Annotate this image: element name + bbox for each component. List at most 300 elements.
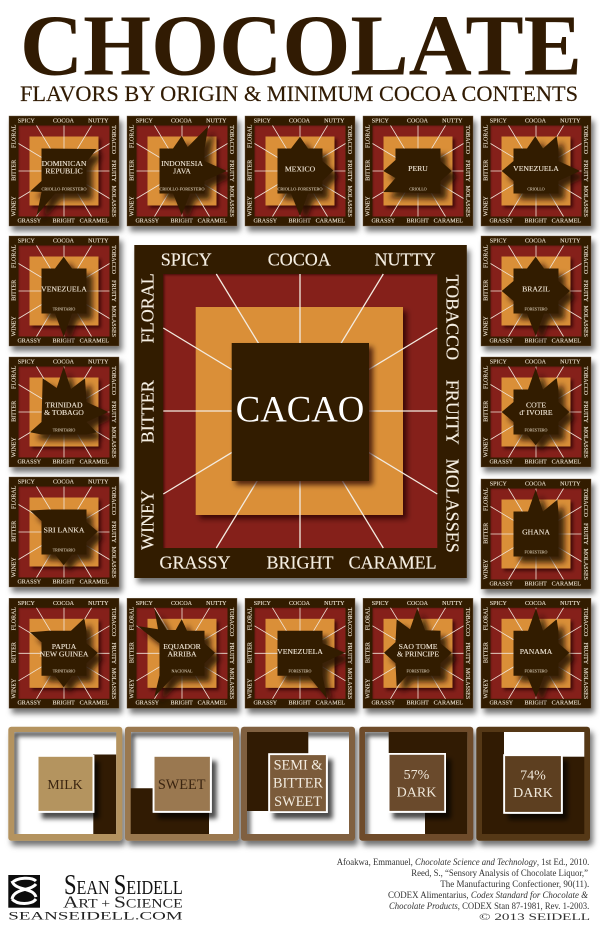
flavor labels: FRUITY [110,401,116,423]
flavor labels: CARAMEL [80,218,109,224]
flavor labels: TOBACCO [110,245,116,275]
flavor labels: CARAMEL [552,218,581,224]
flavor star [514,490,558,556]
references: © 2013 SEIDELL [479,912,590,922]
flavor labels: GRASSY [489,338,514,344]
flavor labels: NUTTY [324,601,345,607]
flavor labels: SPICY [18,239,35,245]
brand tagline: A RT + SCIENCE [63,893,183,912]
flavor labels: BRIGHT [289,218,311,224]
origin name: PERU [408,164,428,173]
flavor labels: WINEY [11,437,17,457]
flavor labels: FLORAL [247,607,253,630]
flavor labels: WINEY [129,196,135,216]
bean type: FORESTERO [525,427,548,432]
flavor labels: MOLASSES [582,186,588,217]
flavor labels: FRUITY [582,160,588,182]
legend: milk [8,727,125,844]
origin name: EQUADOR [163,642,202,651]
origin name: REPUBLIC [45,167,83,176]
flavor star [30,618,98,687]
flavor labels: WINEY [11,557,17,577]
flavor labels: MOLASSES [110,186,116,217]
flavor labels: BITTER [11,160,17,181]
bean type: TRINITARIO [53,547,75,552]
flavor labels: BITTER [137,380,157,443]
flavor labels: BITTER [365,160,371,181]
panel: Peru [363,116,473,226]
flavor labels: WINEY [11,678,17,699]
panel: Venezuela Forestero [245,598,355,708]
flavor labels: MOLASSES [110,306,116,337]
flavor labels: NUTTY [560,482,581,488]
flavor labels: FRUITY [582,401,588,423]
flavor labels [483,601,588,707]
flavor labels: TOBACCO [464,125,470,155]
flavor labels: TOBACCO [228,125,234,155]
legend: semi and bitter sweet [241,727,358,844]
panel: Sri Lanka [9,477,119,587]
flavor labels: BRIGHT [407,701,429,707]
flavor labels: GRASSY [371,218,396,224]
flavor labels: TOBACCO [110,608,116,637]
flavor labels: TOBACCO [346,125,352,155]
bean type: CRIOLLO·FORESTERO [278,186,323,191]
flavor labels: SPICY [254,119,271,125]
flavor labels [11,601,116,707]
panel: Trinidad & Tobago [9,357,119,467]
flavor labels: CARAMEL [349,552,437,572]
flavor labels: SPICY [136,601,153,607]
flavor labels: MOLASSES [464,668,470,699]
flavor labels: NUTTY [88,601,109,607]
flavor labels: GRASSY [17,338,42,344]
flavor labels: FRUITY [228,642,234,665]
label: 57% [404,768,430,783]
flavor labels: CARAMEL [552,581,581,587]
origin name: & TOBAGO [44,408,84,417]
flavor labels: COCOA [525,119,547,125]
flavor labels: FLORAL [11,124,17,148]
flavor labels: TOBACCO [110,486,116,516]
flavor labels: FRUITY [443,380,463,445]
flavor labels: FRUITY [346,160,352,182]
flavor labels: WINEY [483,559,489,579]
flavor labels: CARAMEL [80,701,109,707]
flavor labels: FRUITY [110,642,116,665]
flavor labels: FRUITY [110,521,116,543]
flavor labels: BITTER [365,642,371,663]
flavor labels: WINEY [247,196,253,216]
flavor labels [365,119,470,224]
flavor labels: BRIGHT [266,552,334,572]
legend: sweet [125,727,242,844]
subtitle: FLAVORS BY ORIGIN & MINIMUM COCOA CONTENTS [20,81,578,106]
origin name: d' IVOIRE [519,408,553,417]
flavor labels: FRUITY [228,160,234,182]
flavor labels: MOLASSES [110,668,116,699]
flavor labels: SPICY [372,601,389,607]
references: Afoakwa, Emmanuel, Chocolate Science and Technology, 1st Ed., 2010. [337,857,589,867]
flavor star [278,137,333,216]
flavor star [30,148,97,216]
flavor labels: FLORAL [129,124,135,148]
flavor labels: CARAMEL [198,218,227,224]
flavor labels: COCOA [525,360,547,366]
flavor labels: TOBACCO [582,245,588,275]
flavor labels: BITTER [11,401,17,422]
flavor labels: GRASSY [135,218,160,224]
panel: Equador Arriba [127,598,237,708]
origin name: JAVA [173,167,191,176]
origin name: VENEZUELA [277,647,323,656]
flavor labels: WINEY [129,678,135,699]
flavor labels: MOLASSES [228,668,234,699]
flavor labels [483,482,588,587]
flavor labels: NUTTY [560,119,581,125]
flavor labels: CARAMEL [80,579,109,585]
flavor labels: SPICY [490,119,507,125]
flavor labels: BITTER [11,280,17,301]
icon: Sean Seidell logo mark [8,875,40,908]
flavor labels: CARAMEL [198,701,227,707]
flavor labels: COCOA [407,601,429,607]
flavor labels: SPICY [490,239,507,245]
flavor labels: NUTTY [88,239,109,245]
flavor labels: FLORAL [365,607,371,630]
origin name: TRINIDAD [45,400,83,410]
flavor labels: BITTER [129,160,135,181]
flavor labels: GRASSY [17,701,42,707]
panel: Mexico [245,116,355,226]
flavor labels: MOLASSES [582,549,588,580]
flavor labels: TOBACCO [110,125,116,155]
center label: CACAO [236,389,364,430]
flavor labels: SPICY [490,482,507,488]
flavor labels: TOBACCO [464,608,470,637]
flavor labels: MOLASSES [582,427,588,458]
flavor labels: MOLASSES [443,459,463,553]
flavor labels: GRASSY [159,552,231,572]
flavor labels: SPICY [372,119,389,125]
bean type: CRIOLLO [409,186,427,191]
origin name: SRI LANKA [44,526,85,534]
flavor labels: GRASSY [489,218,514,224]
origin name: ARRIBA [167,649,197,658]
flavor star [383,148,452,194]
references: Reed, S., “Sensory Analysis of Chocolate Liquor,” [411,868,588,878]
flavor labels: COCOA [289,119,311,125]
flavor labels: BRIGHT [171,218,193,224]
label: DARK [397,786,436,801]
flavor labels: TOBACCO [582,608,588,637]
flavor labels: GRASSY [253,701,278,707]
flavor labels: WINEY [137,490,157,550]
bean type: TRINITARIO [53,306,75,311]
bean type: CRIOLLO·FORESTERO [160,186,205,191]
label: MILK [47,777,83,792]
panel: Cote d'Ivoire [481,357,591,467]
flavor labels: WINEY [483,678,489,699]
flavor labels: NUTTY [442,119,463,125]
flavor labels: SPICY [18,360,35,366]
flavor labels: WINEY [365,196,371,216]
flavor labels: MOLASSES [582,668,588,699]
flavor labels: BRIGHT [525,338,547,344]
flavor labels: NUTTY [560,601,581,607]
origin name: PANAMA [520,647,553,656]
origin name: & PRINCIPE [397,649,439,658]
bean type: FORESTERO [525,549,548,554]
flavor labels: WINEY [483,196,489,216]
flavor labels: WINEY [247,678,253,699]
flavor labels: WINEY [11,316,17,336]
brand name: SEAN SEIDELL [64,870,183,901]
flavor labels: BRIGHT [525,218,547,224]
flavor labels: FLORAL [483,244,489,268]
flavor labels: CARAMEL [316,218,345,224]
flavor labels: BRIGHT [525,581,547,587]
flavor labels: NUTTY [206,601,227,607]
flavor labels: FRUITY [464,642,470,665]
panel: Venezuela Criollo [481,116,591,226]
origin name: INDONESIA [161,159,203,168]
flavor labels: MOLASSES [346,186,352,217]
flavor labels: NUTTY [560,360,581,366]
panel: Venezuela Trinitario [9,236,119,346]
bean type: TRINITARIO [53,669,75,674]
flavor labels: FLORAL [483,365,489,389]
flavor labels: NUTTY [206,119,227,125]
flavor labels: BRIGHT [407,218,429,224]
flavor labels: FLORAL [11,485,17,509]
flavor labels: BRIGHT [171,701,193,707]
origin name: DOMINICAN [42,159,87,168]
flavor labels: NUTTY [442,601,463,607]
flavor labels: MOLASSES [464,186,470,217]
panel: Papua New Guinea [9,598,119,708]
flavor labels: MOLASSES [582,306,588,337]
flavor labels: GRASSY [489,581,514,587]
flavor labels: COCOA [268,250,331,270]
flavor labels: GRASSY [135,701,160,707]
flavor labels: SPICY [490,601,507,607]
flavor labels [247,119,352,224]
flavor labels: SPICY [18,119,35,125]
label: SWEET [274,794,322,810]
flavor labels: COCOA [525,601,547,607]
flavor labels: COCOA [289,601,311,607]
flavor star [137,608,215,697]
flavor labels: COCOA [53,480,75,486]
label: SWEET [158,777,206,793]
flavor labels: SPICY [490,360,507,366]
flavor labels: BRIGHT [53,579,75,585]
flavor labels: FLORAL [247,124,253,148]
flavor labels: COCOA [171,601,193,607]
flavor labels: TOBACCO [346,608,352,637]
flavor labels: BRIGHT [53,701,75,707]
flavor labels: TOBACCO [582,366,588,396]
flavor labels: BRIGHT [525,459,547,465]
flavor labels [11,360,116,465]
flavor star [278,631,345,699]
flavor labels: FLORAL [137,273,157,343]
flavor labels: BITTER [247,642,253,663]
origin name: SAO TOME [399,642,438,651]
flavor labels: BRIGHT [525,701,547,707]
flavor labels: CARAMEL [316,701,345,707]
flavor labels: BITTER [247,160,253,181]
panel: Brazil [481,236,591,346]
flavor labels: CARAMEL [552,338,581,344]
flavor star [384,608,452,687]
origin name: NEW GUINEA [40,649,89,658]
flavor labels: NUTTY [88,119,109,125]
flavor labels: BITTER [483,642,489,663]
flavor labels: FLORAL [11,244,17,268]
flavor labels: WINEY [11,196,17,216]
flavor labels: BRIGHT [53,218,75,224]
flavor labels: BITTER [483,280,489,301]
flavor labels: COCOA [53,119,75,125]
flavor labels: FRUITY [582,280,588,302]
flavor labels: CARAMEL [80,338,109,344]
flavor labels: MOLASSES [346,668,352,699]
flavor labels [129,119,234,224]
flavor labels [11,480,116,585]
flavor labels: MOLASSES [228,186,234,217]
flavor labels: MOLASSES [110,547,116,578]
flavor labels [365,601,470,707]
bean type: FORESTERO [525,669,548,674]
flavor labels [129,601,234,707]
flavor labels: FRUITY [464,160,470,182]
panel: Sao Tome & Principe [363,598,473,708]
flavor star [30,367,108,434]
flavor labels: WINEY [483,316,489,336]
flavor labels: NUTTY [88,480,109,486]
flavor labels: NUTTY [324,119,345,125]
flavor labels: CARAMEL [80,459,109,465]
flavor labels: FLORAL [11,607,17,630]
flavor labels: SPICY [18,601,35,607]
flavor labels: CARAMEL [434,218,463,224]
flavor labels: SPICY [136,119,153,125]
references: Chocolate Products, CODEX Stan 87-1981, Rev. 1-2003. [389,901,589,911]
flavor star [30,510,98,565]
flavor labels: BITTER [11,521,17,542]
references: The Manufacturing Confectioner, 90(11). [440,879,589,889]
flavor star [160,126,227,215]
label: 74% [520,768,546,784]
flavor star [42,257,86,337]
bean type: NACIONAL [172,669,193,674]
flavor labels: FRUITY [346,642,352,665]
legend: 57% dark [359,727,476,844]
flavor labels: NUTTY [88,360,109,366]
references: CODEX Alimentarius, Codex Standard for Chocolate & [388,890,589,900]
legend: 74% dark [476,727,590,841]
flavor labels: GRASSY [489,459,514,465]
flavor labels: FLORAL [483,487,489,511]
flavor labels: WINEY [365,678,371,699]
flavor labels: BITTER [483,160,489,181]
flavor labels: FLORAL [129,607,135,630]
references [337,857,590,922]
bean type: TRINITARIO [53,427,75,432]
flavor labels [483,360,588,465]
flavor labels: FLORAL [365,124,371,148]
origin name: COTE [526,400,546,410]
flavor labels: BRIGHT [53,459,75,465]
flavor star [502,368,569,445]
origin name: GHANA [522,528,550,536]
flavor labels: TOBACCO [582,488,588,518]
flavor labels: COCOA [53,239,75,245]
flavor labels [137,250,463,572]
flavor labels: BITTER [11,642,17,663]
origin name: MEXICO [285,164,316,174]
flavor star [502,136,580,194]
flavor labels [11,119,116,224]
flavor labels: TOBACCO [228,608,234,637]
flavor labels: FRUITY [582,523,588,545]
origin name: BRAZIL [522,284,550,294]
flavor labels [247,601,352,707]
website: SEANSEIDELL.COM [8,909,183,922]
flavor labels: GRASSY [253,218,278,224]
flavor labels: COCOA [525,239,547,245]
flavor labels: GRASSY [17,579,42,585]
flavor labels: TOBACCO [582,125,588,155]
flavor labels: COCOA [53,360,75,366]
flavor labels: FRUITY [110,160,116,182]
bean type: FORESTERO [407,669,430,674]
flavor labels: GRASSY [17,218,42,224]
flavor labels: BRIGHT [289,701,311,707]
flavor labels [483,239,588,344]
flavor labels: FRUITY [582,642,588,665]
bean type: FORESTERO [525,306,548,311]
flavor labels: COCOA [171,119,193,125]
flavor labels [11,239,116,344]
flavor labels: SPICY [18,480,35,486]
flavor labels: GRASSY [489,701,514,707]
bean type: CRIOLLO·FORESTERO [42,186,87,191]
flavor labels: FLORAL [483,124,489,148]
flavor labels: NUTTY [560,239,581,245]
flavor labels: GRASSY [371,701,396,707]
flavor labels: COCOA [525,482,547,488]
flavor labels [483,119,588,224]
flavor labels: BITTER [483,523,489,544]
origin name: VENEZUELA [513,164,559,173]
flavor labels: CARAMEL [552,701,581,707]
flavor labels: TOBACCO [443,274,463,360]
flavor labels: SPICY [161,250,212,270]
flavor labels: TOBACCO [110,366,116,396]
flavor labels: FLORAL [483,607,489,630]
panel: central cacao key [134,245,467,578]
flavor labels: NUTTY [375,250,436,270]
flavor labels: WINEY [483,437,489,457]
flavor labels: BRIGHT [53,338,75,344]
flavor labels: SPICY [254,601,271,607]
origin name: VENEZUELA [41,284,87,294]
flavor labels: CARAMEL [434,701,463,707]
flavor labels: CARAMEL [552,459,581,465]
